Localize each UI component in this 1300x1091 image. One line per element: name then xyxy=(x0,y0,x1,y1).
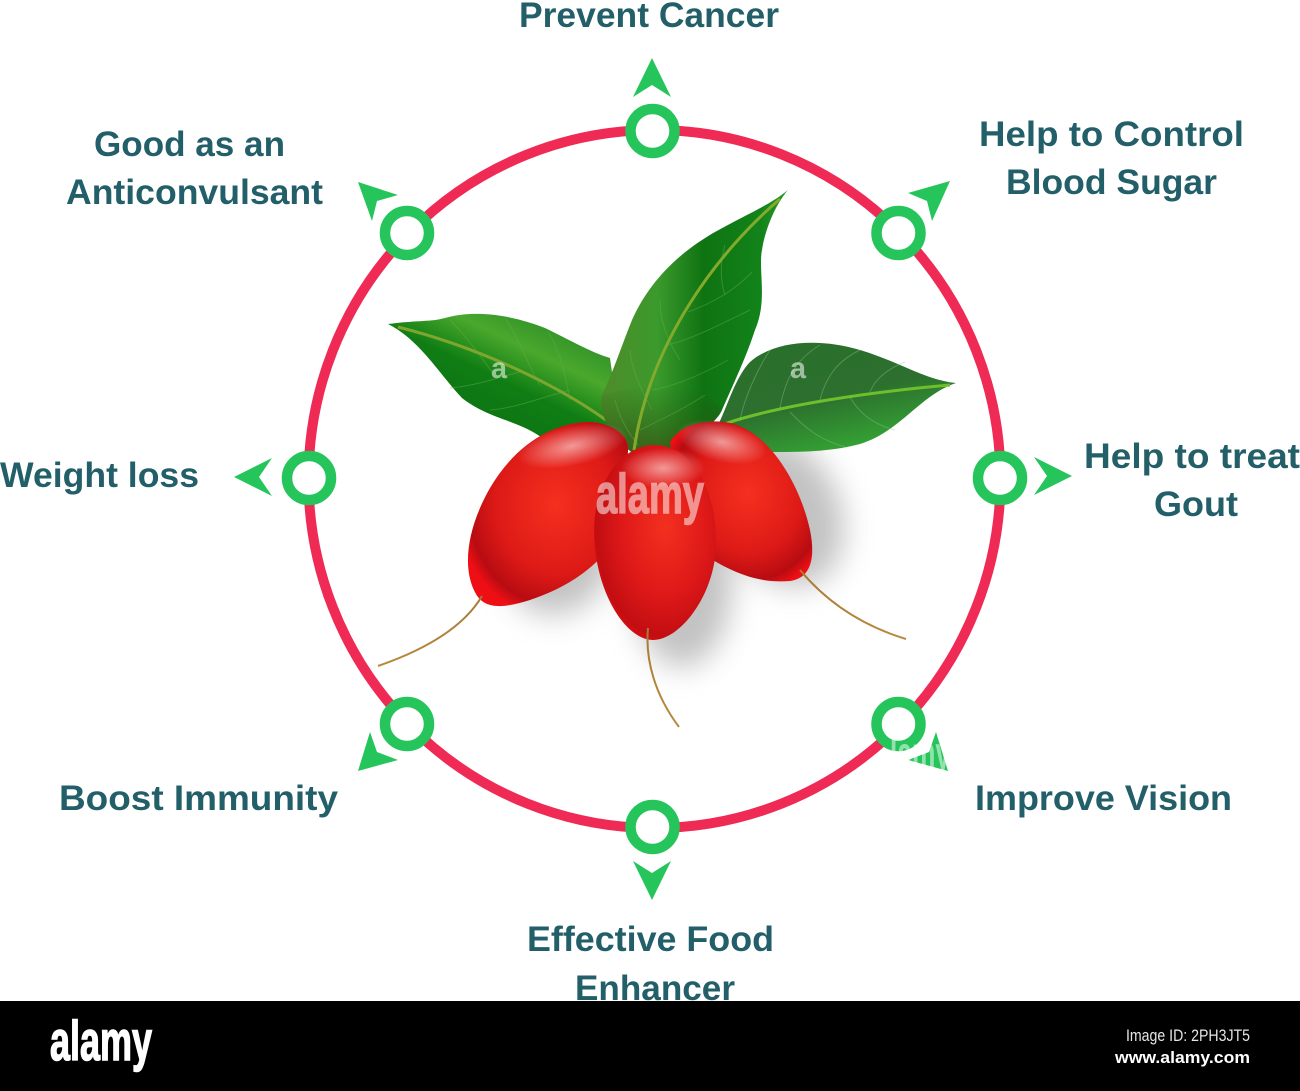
label: Good as an Anticonvulsant: Anticonvulsant xyxy=(66,173,323,212)
label: Help to treat Gout: Gout xyxy=(1154,485,1238,524)
left berry xyxy=(468,415,631,606)
label: Effective Food Enhancer: Effective Food xyxy=(527,920,774,959)
footer logo: alamy: alamy xyxy=(50,1009,152,1072)
left berry hair xyxy=(378,596,482,666)
arrow: right xyxy=(1034,457,1072,495)
right leaf xyxy=(718,343,956,452)
node: top xyxy=(630,109,674,153)
label: Help to Control Blood Sugar xyxy=(979,115,1244,202)
node: left xyxy=(287,456,331,500)
arrow: bottom left xyxy=(358,732,398,771)
label: Good as an Anticonvulsant: Good as an xyxy=(94,125,285,164)
node: top right xyxy=(876,211,920,255)
arrow: left xyxy=(234,458,272,496)
left leaf xyxy=(388,314,620,440)
label: Weight loss: Weight loss xyxy=(0,456,199,495)
arrow: top left xyxy=(358,182,398,221)
arrow: top xyxy=(633,58,671,97)
node: bottom xyxy=(630,805,674,849)
shadow under berries xyxy=(484,417,868,667)
label: Help to Control Blood Sugar: Help to Control xyxy=(979,115,1244,154)
illustration: cornelian cherries with leaves xyxy=(378,190,956,727)
arrow: top right xyxy=(908,181,950,221)
label: Boost Immunity: Boost Immunity xyxy=(59,779,339,818)
node: top left xyxy=(385,211,429,255)
label: Effective Food Enhancer: Enhancer xyxy=(575,969,735,1008)
label: Help to Control Blood Sugar: Blood Sugar xyxy=(1006,163,1217,202)
watermark: a on right leaf: a xyxy=(790,352,806,385)
watermark: a on left leaf: a xyxy=(491,352,507,385)
footer image id: Image ID: 2PH3JT5 xyxy=(1126,1026,1250,1045)
arrow: bottom xyxy=(633,861,671,900)
footer bar xyxy=(0,1001,1300,1091)
label: Help to treat Gout xyxy=(1084,437,1300,524)
node: bottom right xyxy=(876,702,920,746)
label: Effective Food Enhancer xyxy=(527,920,774,1008)
center leaf xyxy=(601,190,788,455)
circular ring xyxy=(308,130,1000,828)
right berry xyxy=(670,411,812,581)
watermark: alamy over bottom right node: lamy xyxy=(890,727,950,779)
center berry xyxy=(594,445,716,640)
node: bottom left xyxy=(385,702,429,746)
right berry hair xyxy=(800,570,906,639)
node: right xyxy=(978,456,1022,500)
watermark: alamy on center berry: alamy xyxy=(596,462,704,525)
label: Improve Vision: Improve Vision xyxy=(975,779,1232,818)
label: Good as an Anticonvulsant xyxy=(66,125,323,212)
center berry hair xyxy=(647,628,679,727)
arrow: bottom right xyxy=(908,732,948,771)
footer website: www.alamy.com xyxy=(1114,1048,1250,1067)
label: Help to treat Gout: Help to treat xyxy=(1084,437,1300,476)
